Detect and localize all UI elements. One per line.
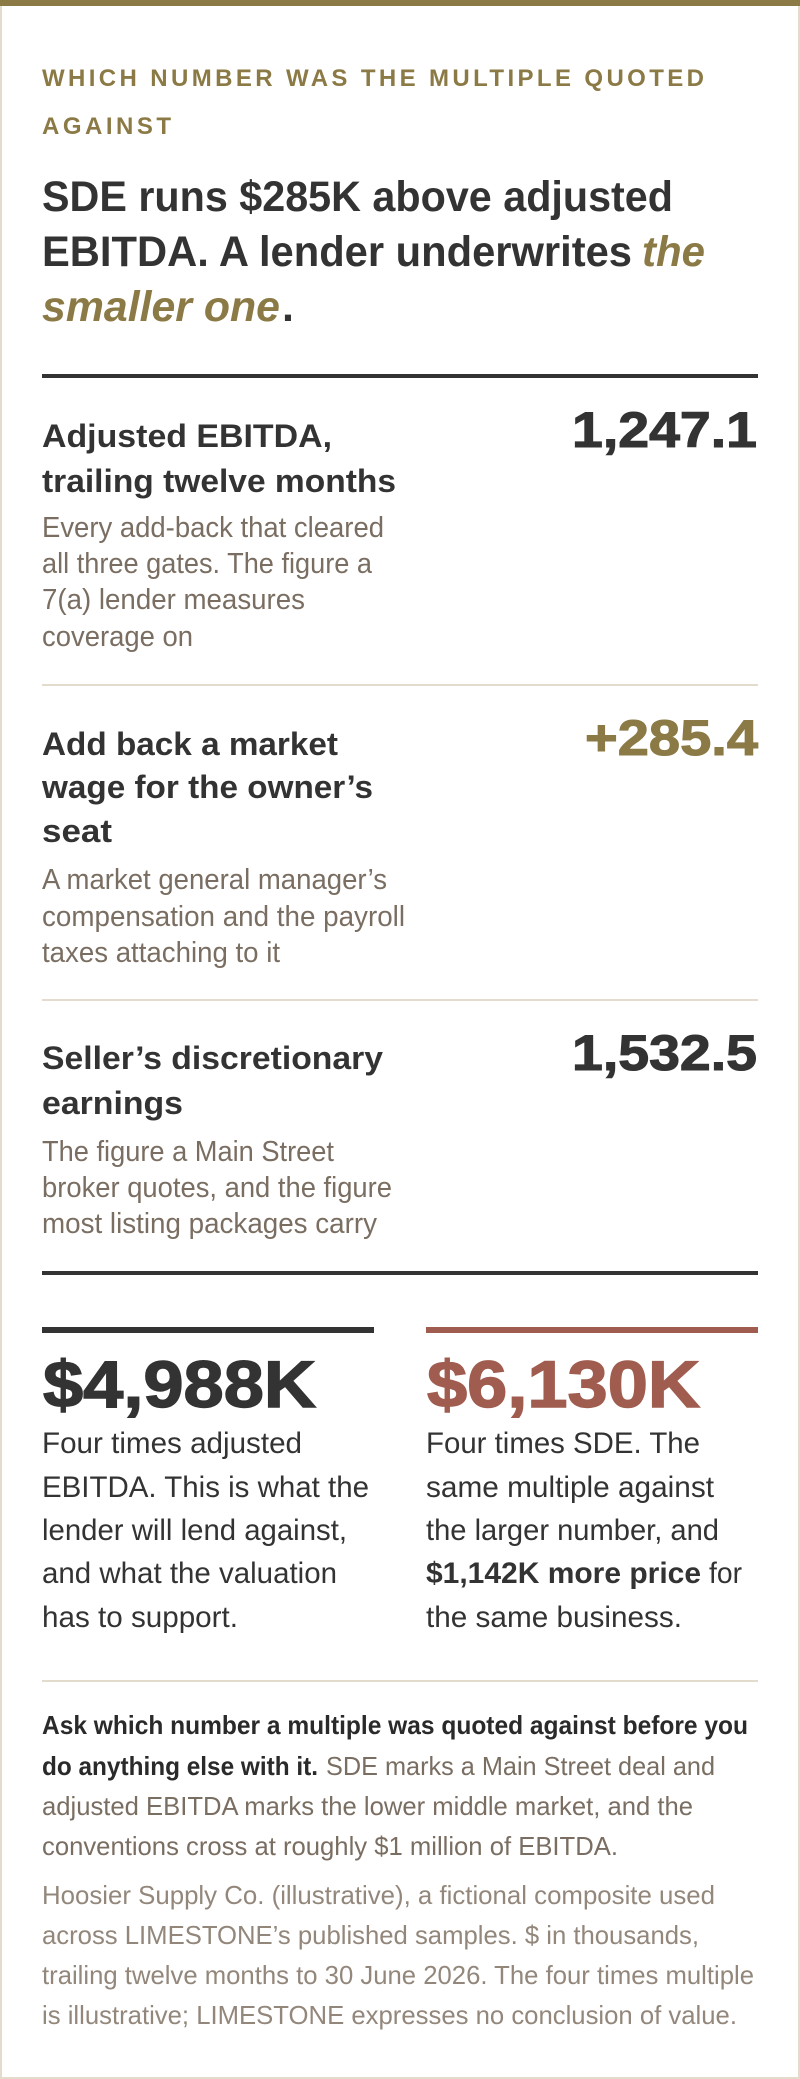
- row description: Every add-back that cleared: [42, 512, 384, 544]
- column text: the same business.: [426, 1601, 682, 1634]
- big value: $6,130K: [427, 1347, 700, 1421]
- column top bar: [42, 1327, 374, 1333]
- takeaway paragraph: Ask which number a multiple was quoted against before you: [42, 1710, 748, 1740]
- main headline: the: [642, 228, 705, 276]
- column text: same multiple against: [426, 1471, 715, 1504]
- column top bar: [426, 1327, 758, 1333]
- column text: and what the valuation: [42, 1557, 337, 1590]
- takeaway paragraph: do anything else with it.: [42, 1751, 318, 1781]
- row description: compensation and the payroll: [42, 901, 405, 933]
- row description: coverage on: [42, 621, 193, 653]
- row: adjusted EBITDA: [42, 402, 757, 653]
- row: seller's discretionary earnings: [42, 1025, 757, 1240]
- row description: all three gates. The figure a: [42, 548, 372, 580]
- column text: has to support.: [42, 1601, 238, 1634]
- row title: Adjusted EBITDA,: [42, 418, 332, 454]
- takeaway paragraph: SDE marks a Main Street deal and: [326, 1751, 715, 1781]
- source note: [42, 1880, 754, 2030]
- row title: [41, 726, 373, 849]
- row description: [42, 864, 405, 969]
- main headline: smaller one: [42, 283, 280, 331]
- row value: +285.4: [585, 710, 758, 766]
- eyebrow heading: WHICH NUMBER WAS THE MULTIPLE QUOTED: [42, 65, 704, 92]
- main headline: [42, 173, 705, 331]
- row title: wage for the owner’s: [41, 769, 373, 805]
- main headline: EBITDA. A lender underwrites: [42, 228, 632, 276]
- row: owner wage add-back: [41, 710, 758, 969]
- source note: Hoosier Supply Co. (illustrative), a fictional composite used: [42, 1880, 715, 1910]
- row description: The figure a Main Street: [42, 1136, 334, 1168]
- main headline: .: [282, 283, 294, 331]
- takeaway paragraph: [42, 1710, 748, 1861]
- column text: $1,142K more price: [426, 1557, 701, 1590]
- row title: seat: [42, 813, 112, 849]
- row description: [42, 512, 384, 653]
- row title: Seller’s discretionary: [42, 1040, 383, 1076]
- source note: trailing twelve months to 30 June 2026. The four times multiple: [42, 1960, 754, 1990]
- row value: 1,247.1: [572, 402, 757, 458]
- row title: earnings: [42, 1085, 183, 1121]
- row description: broker quotes, and the figure: [42, 1172, 392, 1204]
- column text: lender will lend against,: [42, 1514, 347, 1547]
- column text: the larger number, and: [426, 1514, 719, 1547]
- takeaway paragraph: adjusted EBITDA marks the lower middle market, and the: [42, 1791, 693, 1821]
- row description: 7(a) lender measures: [42, 584, 305, 616]
- column text: Four times adjusted: [42, 1427, 302, 1460]
- row description: taxes attaching to it: [42, 937, 280, 969]
- valuation column: four times SDE: [426, 1327, 758, 1634]
- row title: Add back a market: [42, 726, 338, 762]
- eyebrow heading: AGAINST: [42, 113, 171, 140]
- column text: [42, 1427, 369, 1634]
- column text: EBITDA. This is what the: [42, 1471, 369, 1504]
- column text: for: [709, 1557, 742, 1590]
- column text: [426, 1427, 742, 1634]
- source note: is illustrative; LIMESTONE expresses no conclusion of value.: [42, 2000, 737, 2030]
- source note: across LIMESTONE’s published samples. $ in thousands,: [42, 1920, 699, 1950]
- row title: [42, 1040, 383, 1121]
- row description: A market general manager’s: [42, 864, 387, 896]
- main headline: SDE runs $285K above adjusted: [42, 173, 673, 221]
- row description: most listing packages carry: [42, 1208, 378, 1240]
- column text: Four times SDE. The: [426, 1427, 700, 1460]
- row value: 1,532.5: [572, 1025, 757, 1081]
- row title: [42, 418, 396, 499]
- eyebrow heading: [42, 65, 704, 140]
- row title: trailing twelve months: [42, 463, 396, 499]
- row description: [42, 1136, 392, 1240]
- big value: $4,988K: [43, 1347, 316, 1421]
- takeaway paragraph: conventions cross at roughly $1 million of EBITDA.: [42, 1831, 618, 1861]
- valuation column: four times adjusted EBITDA: [42, 1327, 374, 1634]
